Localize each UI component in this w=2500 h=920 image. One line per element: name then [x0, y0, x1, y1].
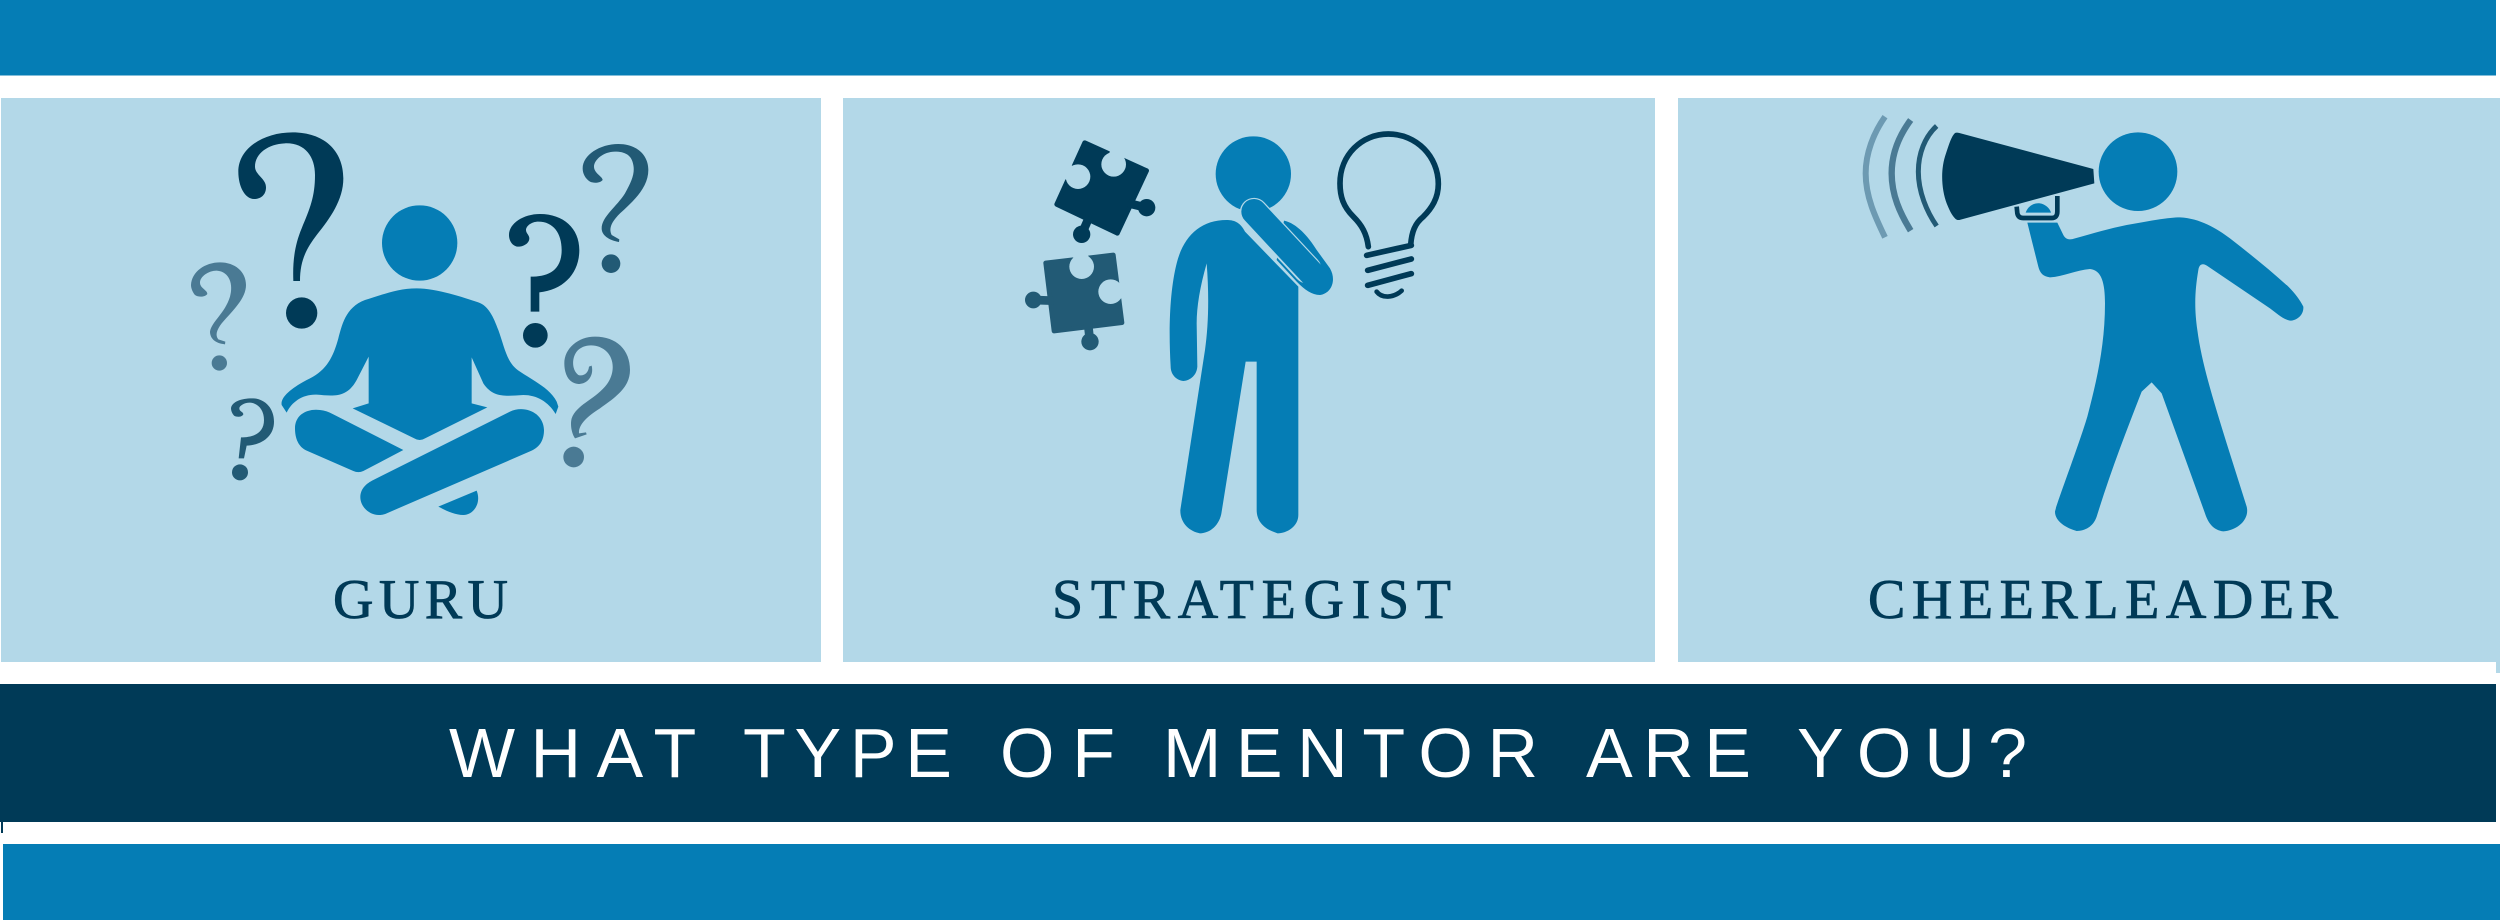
question mark: top right [583, 144, 648, 273]
title banner [0, 684, 2496, 833]
title text: YOU? [1797, 714, 2027, 792]
body [2027, 217, 2303, 531]
right leg [360, 409, 544, 515]
light bulb [1340, 134, 1438, 297]
bottom banner bar [3, 844, 2500, 920]
icon: thinking person with puzzle pieces and light bulb [1025, 134, 1438, 533]
title text: OF [1000, 714, 1115, 792]
title text: WHAT [449, 714, 696, 792]
question mark: right dark [509, 214, 579, 348]
foot [438, 491, 478, 515]
title text: ARE [1586, 714, 1751, 792]
question mark: lower left [231, 398, 274, 480]
white gutter under panel [1655, 662, 2496, 684]
upper arm [1277, 221, 1333, 295]
puzzle piece: mid blue [1025, 252, 1126, 350]
forearm [1254, 212, 1319, 282]
icon: meditating person with question marks [191, 132, 648, 515]
label: cheerleader: CHEERLEADER [1868, 569, 2339, 631]
title text: MENTOR [1163, 714, 1538, 792]
left leg [295, 410, 403, 472]
head [1216, 136, 1291, 212]
sound wave: inner [1918, 126, 1937, 226]
sound wave: middle [1892, 120, 1911, 231]
panel: guru [1, 98, 821, 662]
megaphone [1942, 133, 2094, 220]
label: strategist: STRATEGIST [1052, 569, 1451, 631]
forearm outline [1254, 212, 1307, 269]
question mark: left [191, 262, 246, 371]
torso and arms [282, 288, 558, 440]
panel: strategist [843, 98, 1655, 662]
question mark: lower right [563, 337, 630, 467]
top banner bar [0, 0, 2496, 76]
body [1170, 220, 1298, 533]
question mark: large dark [238, 132, 343, 329]
label: guru: GURU [333, 569, 508, 631]
head [382, 205, 457, 281]
puzzle piece: dark [1057, 143, 1155, 243]
panel: cheerleader [1655, 98, 2500, 684]
head [2099, 132, 2177, 211]
sound wave: outer [1866, 117, 1885, 237]
icon: person with megaphone [1866, 117, 2303, 531]
title text: TYPE [743, 714, 952, 792]
